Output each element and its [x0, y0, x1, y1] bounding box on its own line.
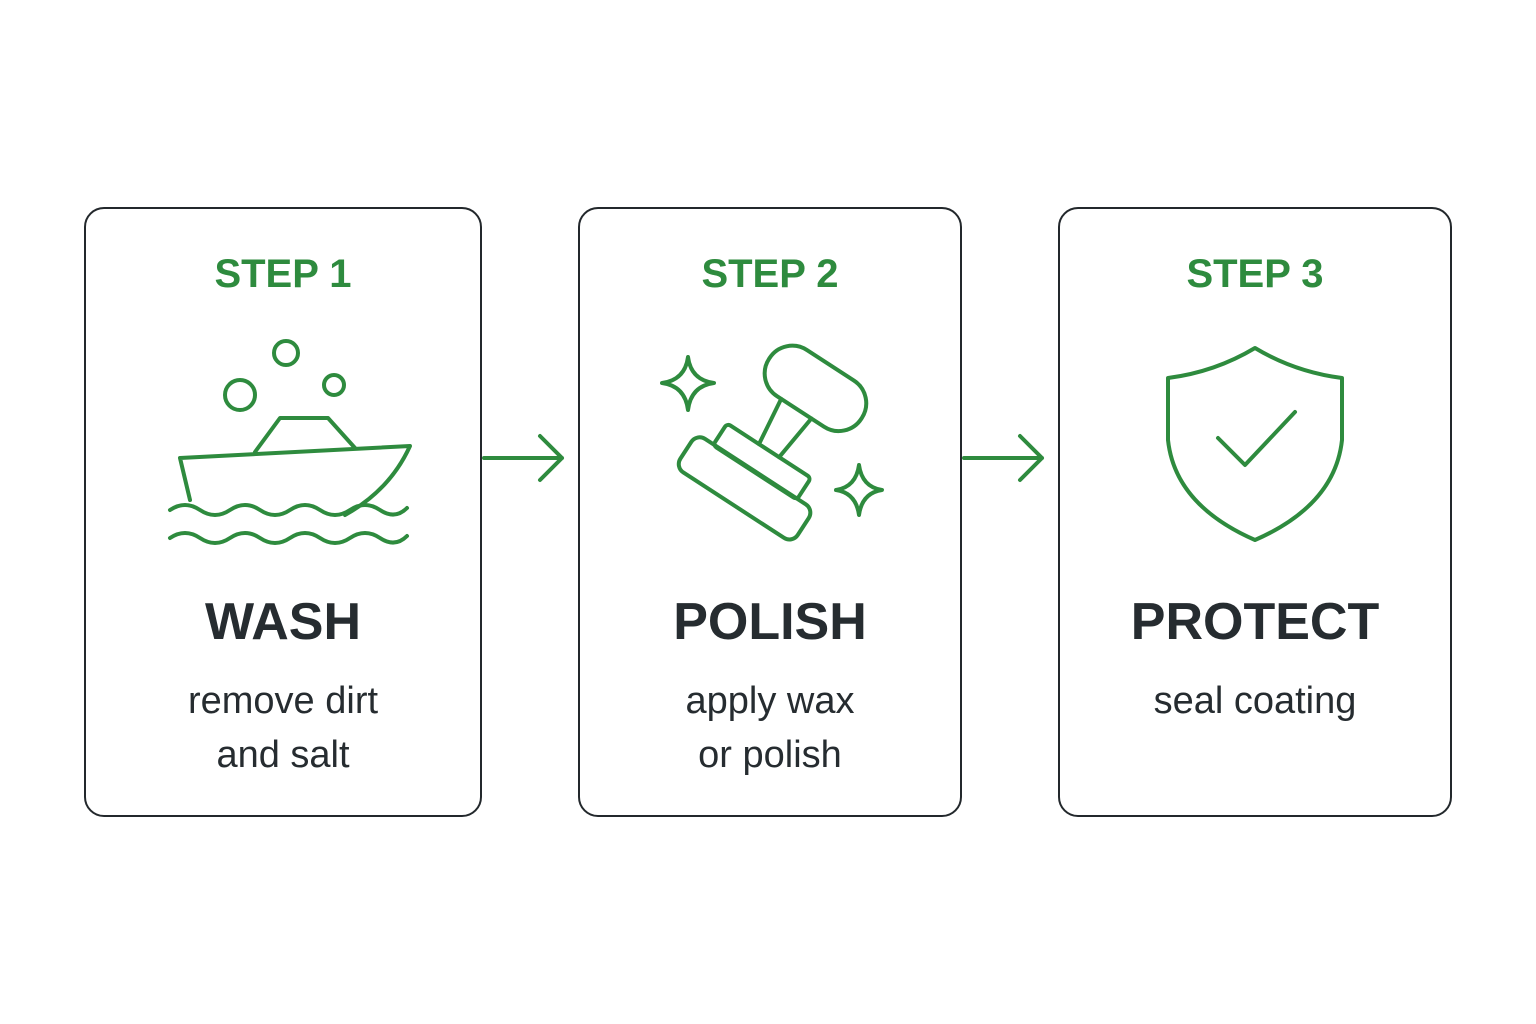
- icon: boat: [170, 341, 410, 543]
- step 3 label: STEP 3: [1186, 252, 1324, 296]
- card: step 3: [1058, 207, 1452, 817]
- desc wash: remove dirt: [188, 680, 378, 722]
- card: step 1: [84, 207, 482, 817]
- title wash: WASH: [205, 593, 361, 651]
- step 2 label: STEP 2: [701, 252, 839, 296]
- arrow 2: [964, 436, 1042, 480]
- icon: shield: [1168, 348, 1342, 540]
- desc protect: seal coating: [1154, 680, 1356, 722]
- title protect: PROTECT: [1131, 593, 1379, 651]
- desc polish: or polish: [698, 734, 842, 776]
- card: step 2: [578, 207, 962, 817]
- icon: polisher: [662, 324, 885, 543]
- desc polish: apply wax: [686, 680, 854, 722]
- title polish: POLISH: [673, 593, 867, 651]
- desc polish: [686, 680, 854, 776]
- arrow 1: [484, 436, 562, 480]
- desc wash: [188, 680, 378, 776]
- desc wash: and salt: [216, 734, 350, 776]
- step 1 label: STEP 1: [214, 252, 352, 296]
